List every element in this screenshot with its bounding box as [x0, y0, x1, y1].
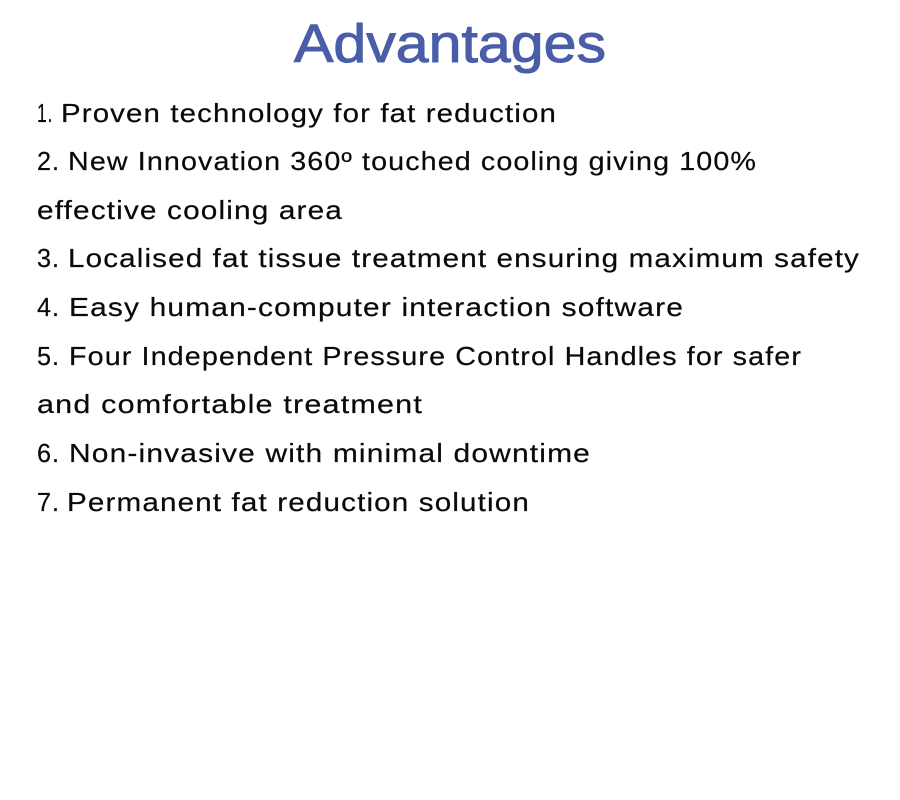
item 7: 7.: [37, 487, 60, 517]
item 1: 1.: [37, 98, 53, 128]
item 5: 5.: [37, 341, 60, 371]
item 5: and comfortable treatment: [37, 389, 423, 419]
item 3: Localised fat tissue treatment ensuring maximum safety: [68, 243, 860, 273]
item 1: Proven technology for fat reduction: [61, 98, 557, 128]
item 2: [37, 146, 757, 225]
item 6: Non-invasive with minimal downtime: [69, 438, 591, 468]
item 5: [37, 341, 802, 419]
item 2: effective cooling area: [37, 195, 343, 225]
item 2: 2.: [37, 146, 60, 176]
item 4: Easy human-computer interaction software: [69, 292, 684, 322]
item 5: Four Independent Pressure Control Handles for safer: [69, 341, 802, 371]
item 2: New Innovation 360º touched cooling giving 100%: [68, 146, 757, 176]
item 6: 6.: [37, 438, 60, 468]
item 3: 3.: [37, 243, 60, 273]
advantages list: [37, 98, 860, 517]
item 4: 4.: [37, 292, 60, 322]
title: Advantages: [294, 14, 606, 74]
item 7: Permanent fat reduction solution: [67, 487, 530, 517]
